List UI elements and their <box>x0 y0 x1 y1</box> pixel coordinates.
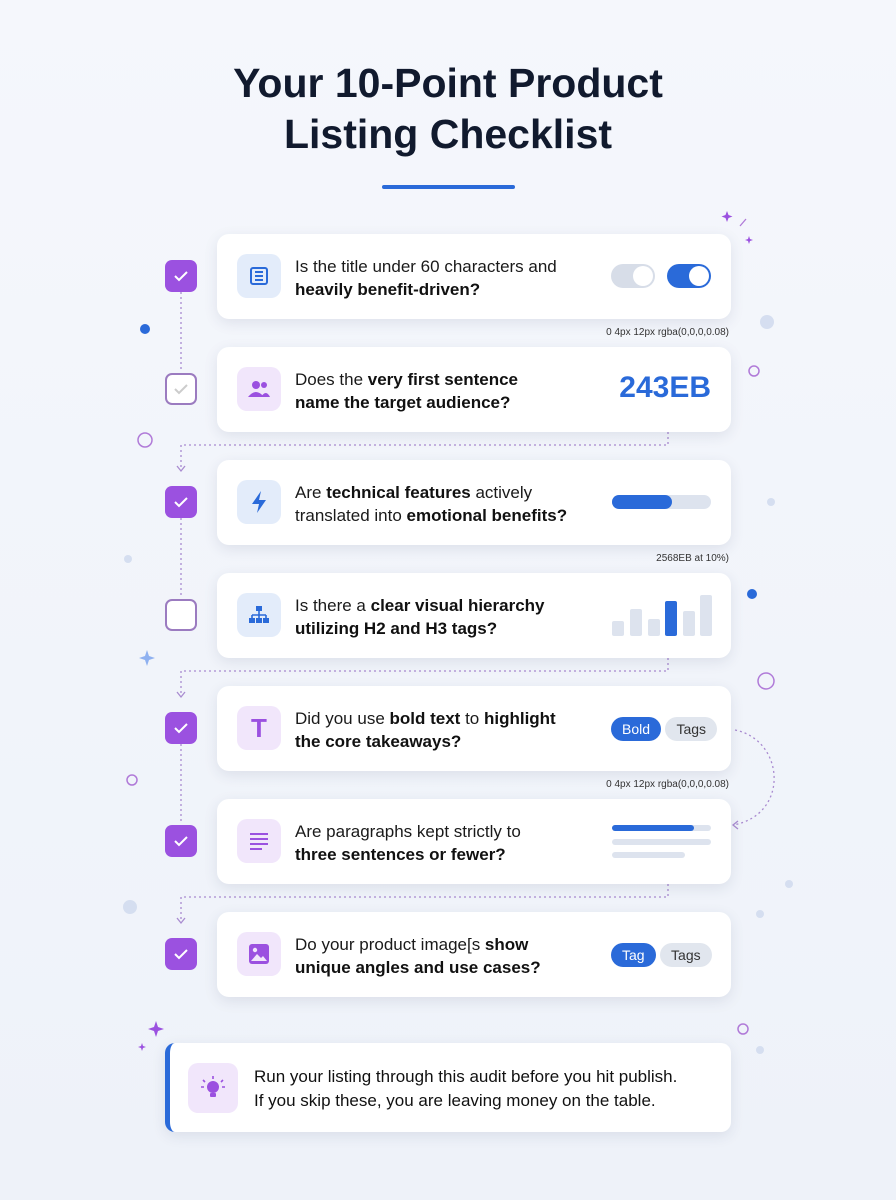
progress bar <box>612 495 711 509</box>
card 4: Is there a clear visual hierarchy <box>295 596 544 615</box>
card 6 <box>217 799 731 884</box>
checkbox 7 <box>165 938 197 970</box>
note 3: 0 4px 12px rgba(0,0,0,0.08) <box>606 779 729 790</box>
checkbox 1 <box>165 260 197 292</box>
callout footer <box>165 1043 731 1132</box>
card 1: Is the title under 60 characters and <box>295 257 557 276</box>
title underline <box>382 185 515 189</box>
checkbox 4 <box>165 599 197 631</box>
card 7 <box>217 912 731 997</box>
icon: lightbulb <box>188 1063 238 1113</box>
card 7: unique angles and use cases? <box>295 958 541 977</box>
card 1: heavily benefit-driven? <box>295 280 480 299</box>
checkbox 6 <box>165 825 197 857</box>
card 4: utilizing H2 and H3 tags? <box>295 619 497 638</box>
pills <box>611 717 717 741</box>
card 5: the core takeaways? <box>295 732 461 751</box>
title: Your 10-Point Product <box>233 60 663 106</box>
bar chart <box>612 595 712 636</box>
pills: Tags <box>676 721 706 737</box>
callout footer: Run your listing through this audit before you hit publish. <box>254 1067 677 1086</box>
icon: paragraph lines <box>237 819 281 863</box>
card 2: name the target audience? <box>295 393 510 412</box>
icon: T: T <box>251 712 267 742</box>
card 3: translated into emotional benefits? <box>295 506 567 525</box>
note 1: 0 4px 12px rgba(0,0,0,0.08) <box>606 327 729 338</box>
callout footer: If you skip these, you are leaving money on the table. <box>254 1091 656 1110</box>
card 2 <box>217 347 731 432</box>
card 1 <box>217 234 731 319</box>
card 6: three sentences or fewer? <box>295 845 506 864</box>
card 4 <box>217 573 731 658</box>
pills <box>611 943 712 967</box>
icon: T <box>237 706 281 750</box>
icon: lightning <box>237 480 281 524</box>
checkbox 3 <box>165 486 197 518</box>
toggles <box>611 264 655 288</box>
icon: document <box>237 254 281 298</box>
card 3: Are technical features actively <box>295 483 532 502</box>
card 3 <box>217 460 731 545</box>
icon: people <box>237 367 281 411</box>
card 5 <box>217 686 731 771</box>
title <box>233 60 663 157</box>
pills: Tag <box>622 947 645 963</box>
stat 243EB: 243EB <box>619 371 711 404</box>
pills: Bold <box>622 721 650 737</box>
checkbox 5 <box>165 712 197 744</box>
text lines graphic <box>612 825 711 831</box>
pills: Tags <box>671 947 701 963</box>
checkbox 2 <box>165 373 197 405</box>
title: Listing Checklist <box>284 111 612 157</box>
decorative dots <box>140 324 150 334</box>
card 7: Do your product image[s show <box>295 935 528 954</box>
note 2: 2568EB at 10%) <box>656 553 729 564</box>
card 2: Does the very first sentence <box>295 370 518 389</box>
icon: hierarchy <box>237 593 281 637</box>
icon: image <box>237 932 281 976</box>
card 5: Did you use bold text to highlight <box>295 709 556 728</box>
card 6: Are paragraphs kept strictly to <box>295 822 521 841</box>
